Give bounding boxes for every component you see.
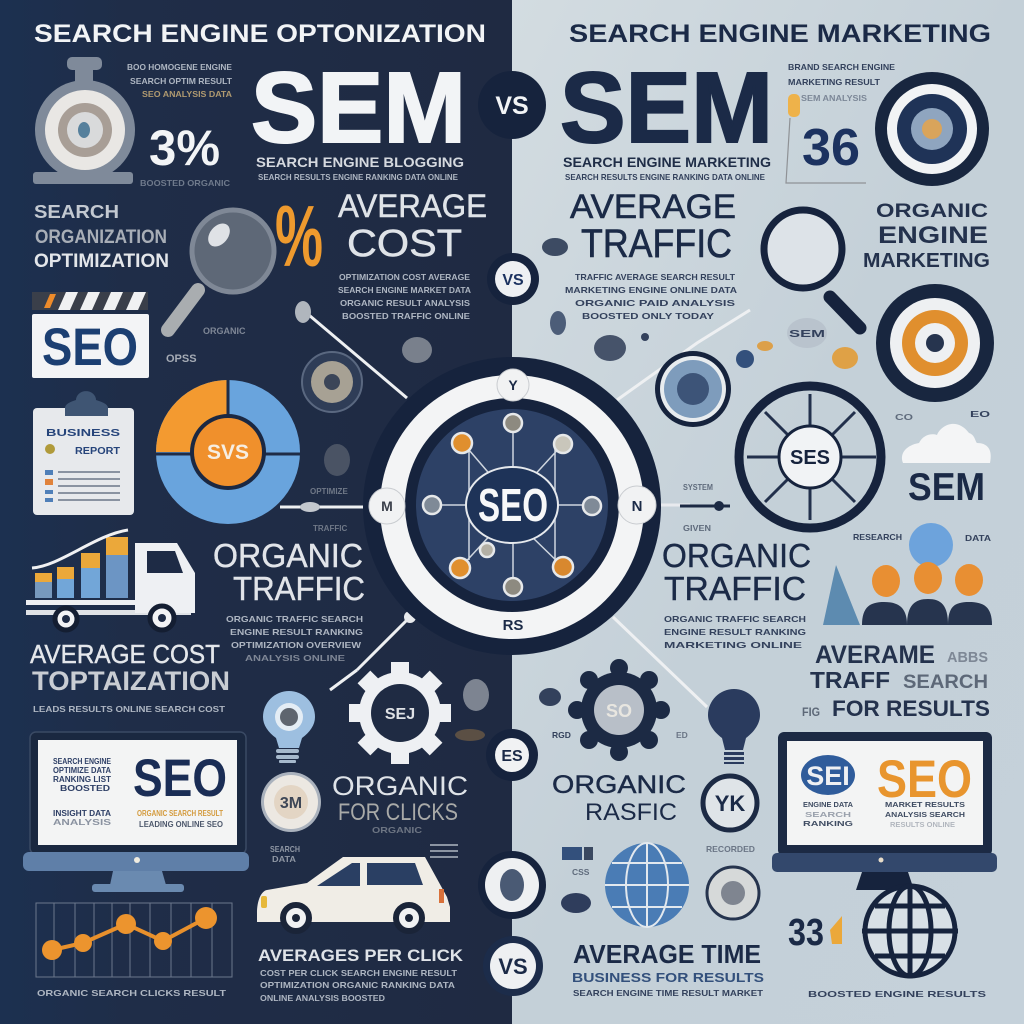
text block: average cost notes: SEARCH ENGINE MARKET DATA	[338, 285, 471, 295]
text block: average traffic notes	[565, 272, 737, 321]
monitor: left SEO: RANKING LIST	[53, 775, 111, 784]
text block: organic traffic notes left: ANALYSIS ONLINE	[245, 653, 345, 663]
badge: medallion middle	[478, 851, 546, 919]
icon: left small items: OPTIMIZE	[310, 487, 348, 496]
hub ring badges	[369, 369, 656, 634]
monitor: left SEO: SEO	[133, 749, 227, 808]
monitor: left SEO: ORGANIC SEARCH RESULT	[137, 809, 223, 818]
icon: SEO clapper	[32, 292, 149, 378]
hub ring badges: RS	[503, 617, 523, 634]
heading: average cost optimization: TOPTAIZATION	[32, 666, 230, 696]
subtitle: search engine blogging: SEARCH ENGINE BLOGGING	[256, 154, 464, 170]
monitor: left SEO: BOOSTED	[60, 784, 110, 793]
heading: organic traffic lower	[552, 771, 686, 826]
heading: average time: AVERAGE TIME	[573, 939, 761, 969]
heading: average traffic for results	[802, 641, 990, 721]
heading: average traffic for results: SEARCH	[903, 672, 988, 693]
monitor: right SEO: SEARCH	[805, 810, 851, 819]
big title: right SEM: SEM	[560, 52, 773, 164]
text block: clicks notes	[270, 825, 422, 864]
monitor: right SEO: SEI	[806, 761, 850, 791]
icon: steering wheel SES	[739, 386, 881, 528]
icon: small medallion lower: 3M	[280, 795, 302, 812]
badge: VS upper	[487, 253, 539, 305]
text block: organic traffic notes left: ORGANIC TRAFFIC SEARCH	[226, 614, 363, 624]
text block: top left notes	[127, 62, 233, 188]
text block: organic traffic notes right: ENGINE RESULT RANKING	[664, 627, 806, 637]
text block: scribble notes near magnifier	[166, 326, 246, 365]
icon: right small items lower: ED	[676, 730, 688, 740]
monitor: left SEO: ANALYSIS	[53, 818, 112, 827]
text block: small labels near people: GIVEN	[683, 523, 711, 533]
icon: right small items lower: RGD	[552, 730, 571, 740]
hub ring badges: N	[632, 498, 642, 515]
stat: 36: 36	[802, 119, 860, 177]
badge: top VS	[478, 71, 546, 139]
heading: average time	[572, 939, 764, 985]
heading: average cost optimization	[30, 639, 230, 714]
heading: average traffic for results: FOR RESULTS	[832, 696, 990, 721]
heading: average traffic for results: ABBS	[947, 649, 988, 666]
subtitle: search engine marketing small: SEARCH ENGINE MARKETING	[563, 154, 771, 170]
icon: right small items lower	[539, 688, 688, 740]
icon: clipboard: REPORT	[75, 446, 120, 457]
icon: left small items: TRAFFIC	[313, 524, 347, 533]
icon: stripes above car	[430, 844, 458, 858]
text block: top right notes: BRAND SEARCH ENGINE	[788, 62, 895, 72]
icon: gear	[349, 662, 451, 764]
heading: average traffic for results: AVERAME	[815, 641, 935, 669]
icon: right medallion	[655, 351, 731, 427]
heading: average traffic: AVERAGE	[570, 188, 736, 226]
badge: VS upper: VS	[502, 272, 524, 289]
icon: steering wheel SES: SES	[790, 447, 830, 469]
text block: top left notes: BOO HOMOGENE ENGINE	[127, 62, 232, 72]
heading: organic traffic right: TRAFFIC	[664, 570, 806, 607]
heading: search engine optimization: SEARCH ENGINE OPTONIZATION	[34, 20, 486, 48]
heading: organic traffic lower: RASFIC	[585, 799, 677, 826]
icon: small medallion lower	[261, 772, 321, 832]
icon: globe mid	[605, 843, 689, 927]
icon: right gear	[568, 659, 670, 761]
icon: dial medallion	[707, 867, 759, 919]
heading: organic traffic lower: ORGANIC	[552, 771, 686, 799]
heading: organic for clicks: ORGANIC	[332, 771, 468, 801]
hub ring badges: Y	[508, 377, 518, 393]
text block: search optimization label: SEARCH	[34, 202, 119, 222]
heading: average traffic for results: FIG	[802, 705, 820, 719]
text block: average traffic notes: MARKETING ENGINE ONLINE DATA	[565, 285, 737, 295]
text block: organic engine marketing: ORGANIC	[876, 201, 988, 222]
hub center SEO: SEO	[478, 479, 548, 531]
icon: globe bottom right	[862, 886, 958, 976]
icon: right small medallion	[703, 776, 757, 830]
label: SEM right: SEM	[908, 466, 985, 509]
text block: organic traffic notes left: ENGINE RESULT RANKING	[230, 627, 363, 637]
text block: per click notes: OPTIMIZATION ORGANIC RANKING DATA	[260, 980, 455, 990]
icon: target top right	[875, 72, 989, 186]
heading: organic for clicks	[332, 771, 468, 826]
heading: average per click: AVERAGES PER CLICK	[258, 946, 464, 965]
panel: right light background	[512, 0, 1024, 1024]
text block: organic traffic notes left: OPTIMIZATION OVERVIEW	[231, 640, 362, 650]
heading: organic traffic left: TRAFFIC	[233, 570, 365, 607]
icon: cloud	[902, 424, 991, 463]
icon: clipboard	[33, 391, 134, 515]
text block: small labels near people: SYSTEM	[683, 482, 713, 492]
text block: organic traffic notes right: MARKETING ONLINE	[664, 640, 803, 650]
icon: right gear: SO	[606, 701, 632, 721]
big title: left SEM: SEM	[251, 52, 466, 164]
heading: average cost optimization: AVERAGE COST	[30, 639, 220, 669]
text block: organic traffic notes right: ORGANIC TRAFFIC SEARCH	[664, 614, 806, 624]
heading: average cost	[338, 188, 487, 265]
hub ring badges: M	[381, 498, 393, 514]
text block: average cost notes: OPTIMIZATION COST AVERAGE	[339, 272, 470, 282]
monitor: left SEO: INSIGHT DATA	[53, 809, 111, 818]
heading: average cost optimization: LEADS RESULTS ONLINE SEARCH COST	[33, 704, 226, 714]
icon: gear: SEJ	[385, 706, 415, 723]
text block: average time notes: SEARCH ENGINE TIME RESULT MARKET	[573, 988, 764, 998]
monitor: left SEO: SEARCH ENGINE	[53, 757, 112, 766]
text block: average traffic notes: ORGANIC PAID ANALYSIS	[575, 298, 735, 308]
monitor: right SEO: RESULTS ONLINE	[890, 820, 955, 829]
heading: organic traffic right: ORGANIC	[662, 537, 811, 574]
text block: organic traffic notes left	[226, 614, 363, 663]
badge: VS bottom: VS	[498, 954, 528, 979]
heading: average cost: AVERAGE	[338, 188, 487, 224]
heading: organic for clicks: FOR CLICKS	[338, 799, 458, 826]
text block: small labels near people: CO	[895, 412, 914, 422]
heading: organic traffic right	[662, 537, 811, 607]
panel: left dark background	[0, 0, 512, 1024]
icon: right small items: SEM	[789, 329, 825, 340]
badge: top VS: VS	[495, 92, 529, 120]
network nodes	[423, 414, 601, 596]
monitor: left SEO: LEADING ONLINE SEO	[139, 820, 223, 829]
text block: organic engine marketing: ENGINE	[878, 222, 988, 249]
text block: per click notes	[260, 968, 458, 1003]
text block: search optimization label: ORGANIZATION	[35, 227, 167, 248]
diagram: central hub	[363, 357, 661, 655]
badge: SS lower: ES	[501, 748, 523, 765]
badge: SS lower	[486, 729, 538, 781]
chart: line chart: ORGANIC SEARCH CLICKS RESULT	[37, 988, 227, 998]
text block: average traffic notes: BOOSTED ONLY TODAY	[582, 311, 714, 321]
heading: average cost: COST	[347, 223, 462, 265]
text block: recorded note: RECORDED	[706, 844, 755, 854]
icon: white car	[257, 857, 450, 931]
monitor: left SEO: OPTIMIZE DATA	[53, 766, 111, 775]
text block: organic engine marketing: MARKETING	[863, 250, 990, 272]
monitor: right SEO: ANALYSIS SEARCH	[885, 810, 965, 819]
text block: subtitle notes left: SEARCH RESULTS ENGINE RANKING DATA ONLINE	[258, 172, 458, 182]
chart: donut: SVS	[207, 441, 249, 464]
monitor: right SEO: SEO	[877, 750, 972, 809]
decoration: orange tag and stat box	[786, 94, 866, 183]
monitor: right SEO: MARKET RESULTS	[885, 800, 965, 809]
monitor: right SEO	[772, 732, 997, 890]
icon: clipboard: BUSINESS	[46, 428, 120, 439]
icon: right small medallion: YK	[715, 791, 745, 816]
text block: top right notes: MARKETING RESULT	[788, 77, 881, 87]
text block: average cost notes	[338, 272, 471, 321]
chart: truck with bars	[26, 530, 195, 630]
icon: orange percent: %	[275, 189, 323, 285]
connector lines	[280, 310, 750, 707]
heading: average time: BUSINESS FOR RESULTS	[572, 970, 764, 985]
icon: left bulb	[263, 691, 315, 763]
icon: magnifying glass right	[764, 210, 860, 328]
icon: magnifying glass left	[168, 210, 274, 330]
text block: search optimization label	[34, 202, 169, 272]
icon: orange target	[876, 284, 994, 402]
network lines	[432, 423, 592, 587]
monitor: right SEO: RANKING	[803, 819, 853, 828]
text block: scribble notes near magnifier: OPSS	[166, 353, 197, 365]
stat: 33: 33	[788, 912, 824, 954]
text block: clicks notes: SEARCH	[270, 844, 300, 854]
text block: scribble notes near magnifier: ORGANIC	[203, 326, 246, 336]
heading: search engine marketing: SEARCH ENGINE MARKETING	[569, 20, 991, 48]
heading: average traffic: TRAFFIC	[581, 222, 732, 266]
icon: right small items	[542, 238, 858, 369]
text block: top right notes: SEM ANALYSIS	[801, 93, 867, 103]
chart: donut	[156, 380, 300, 524]
text block: top left notes: SEARCH OPTIM RESULT	[130, 76, 233, 86]
icon: right bulb	[708, 689, 760, 764]
lens around SEO	[466, 467, 558, 543]
text block: average cost notes: BOOSTED TRAFFIC ONLINE	[342, 311, 470, 321]
text block: top left notes: SEO ANALYSIS DATA	[142, 89, 232, 99]
text block: small labels near people: RESEARCH	[853, 532, 902, 542]
text block: top left notes: BOOSTED ORGANIC	[140, 178, 230, 188]
icon: stopwatch gauge	[33, 57, 135, 184]
text block: per click notes: COST PER CLICK SEARCH ENGINE RESULT	[260, 968, 458, 978]
monitor: right SEO: ENGINE DATA	[803, 800, 854, 809]
text block: organic engine marketing	[863, 201, 990, 272]
monitor: left SEO	[23, 732, 249, 892]
text block: subtitle notes right: SEARCH RESULTS ENGINE RANKING DATA ONLINE	[565, 172, 765, 182]
icon: small square group: CSS	[572, 867, 590, 877]
heading: organic traffic left	[213, 537, 365, 607]
stat: 3 percent: 3%	[149, 120, 220, 176]
text block: bottom right results: BOOSTED ENGINE RESULTS	[808, 989, 986, 999]
text block: clicks notes: ORGANIC	[372, 825, 422, 835]
text block: search optimization label: OPTIMIZATION	[34, 251, 169, 272]
icon: small gauge medallion	[302, 352, 362, 412]
heading: organic traffic left: ORGANIC	[213, 537, 363, 574]
text block: organic traffic notes right	[664, 614, 806, 650]
icon: small square group	[561, 847, 593, 913]
heading: average traffic	[570, 188, 736, 266]
icon: connector knobs	[295, 301, 724, 623]
text block: small labels near people	[683, 409, 991, 543]
chart: line chart	[36, 903, 232, 998]
badge: VS bottom	[483, 936, 543, 996]
icon: SEO clapper: SEO	[42, 318, 138, 377]
heading: average traffic for results: TRAFF	[810, 667, 890, 693]
text block: small labels near people: DATA	[965, 533, 991, 543]
text block: per click notes: ONLINE ANALYSIS BOOSTED	[260, 993, 385, 1003]
icon: left small items	[310, 337, 489, 741]
text block: clicks notes: DATA	[272, 854, 296, 864]
icon: people group	[823, 523, 992, 625]
text block: average traffic notes: TRAFFIC AVERAGE SEARCH RESULT	[575, 272, 736, 282]
text block: average cost notes: ORGANIC RESULT ANALYSIS	[340, 298, 470, 308]
text block: small labels near people: EO	[970, 409, 991, 419]
text block: top right notes	[788, 62, 895, 103]
